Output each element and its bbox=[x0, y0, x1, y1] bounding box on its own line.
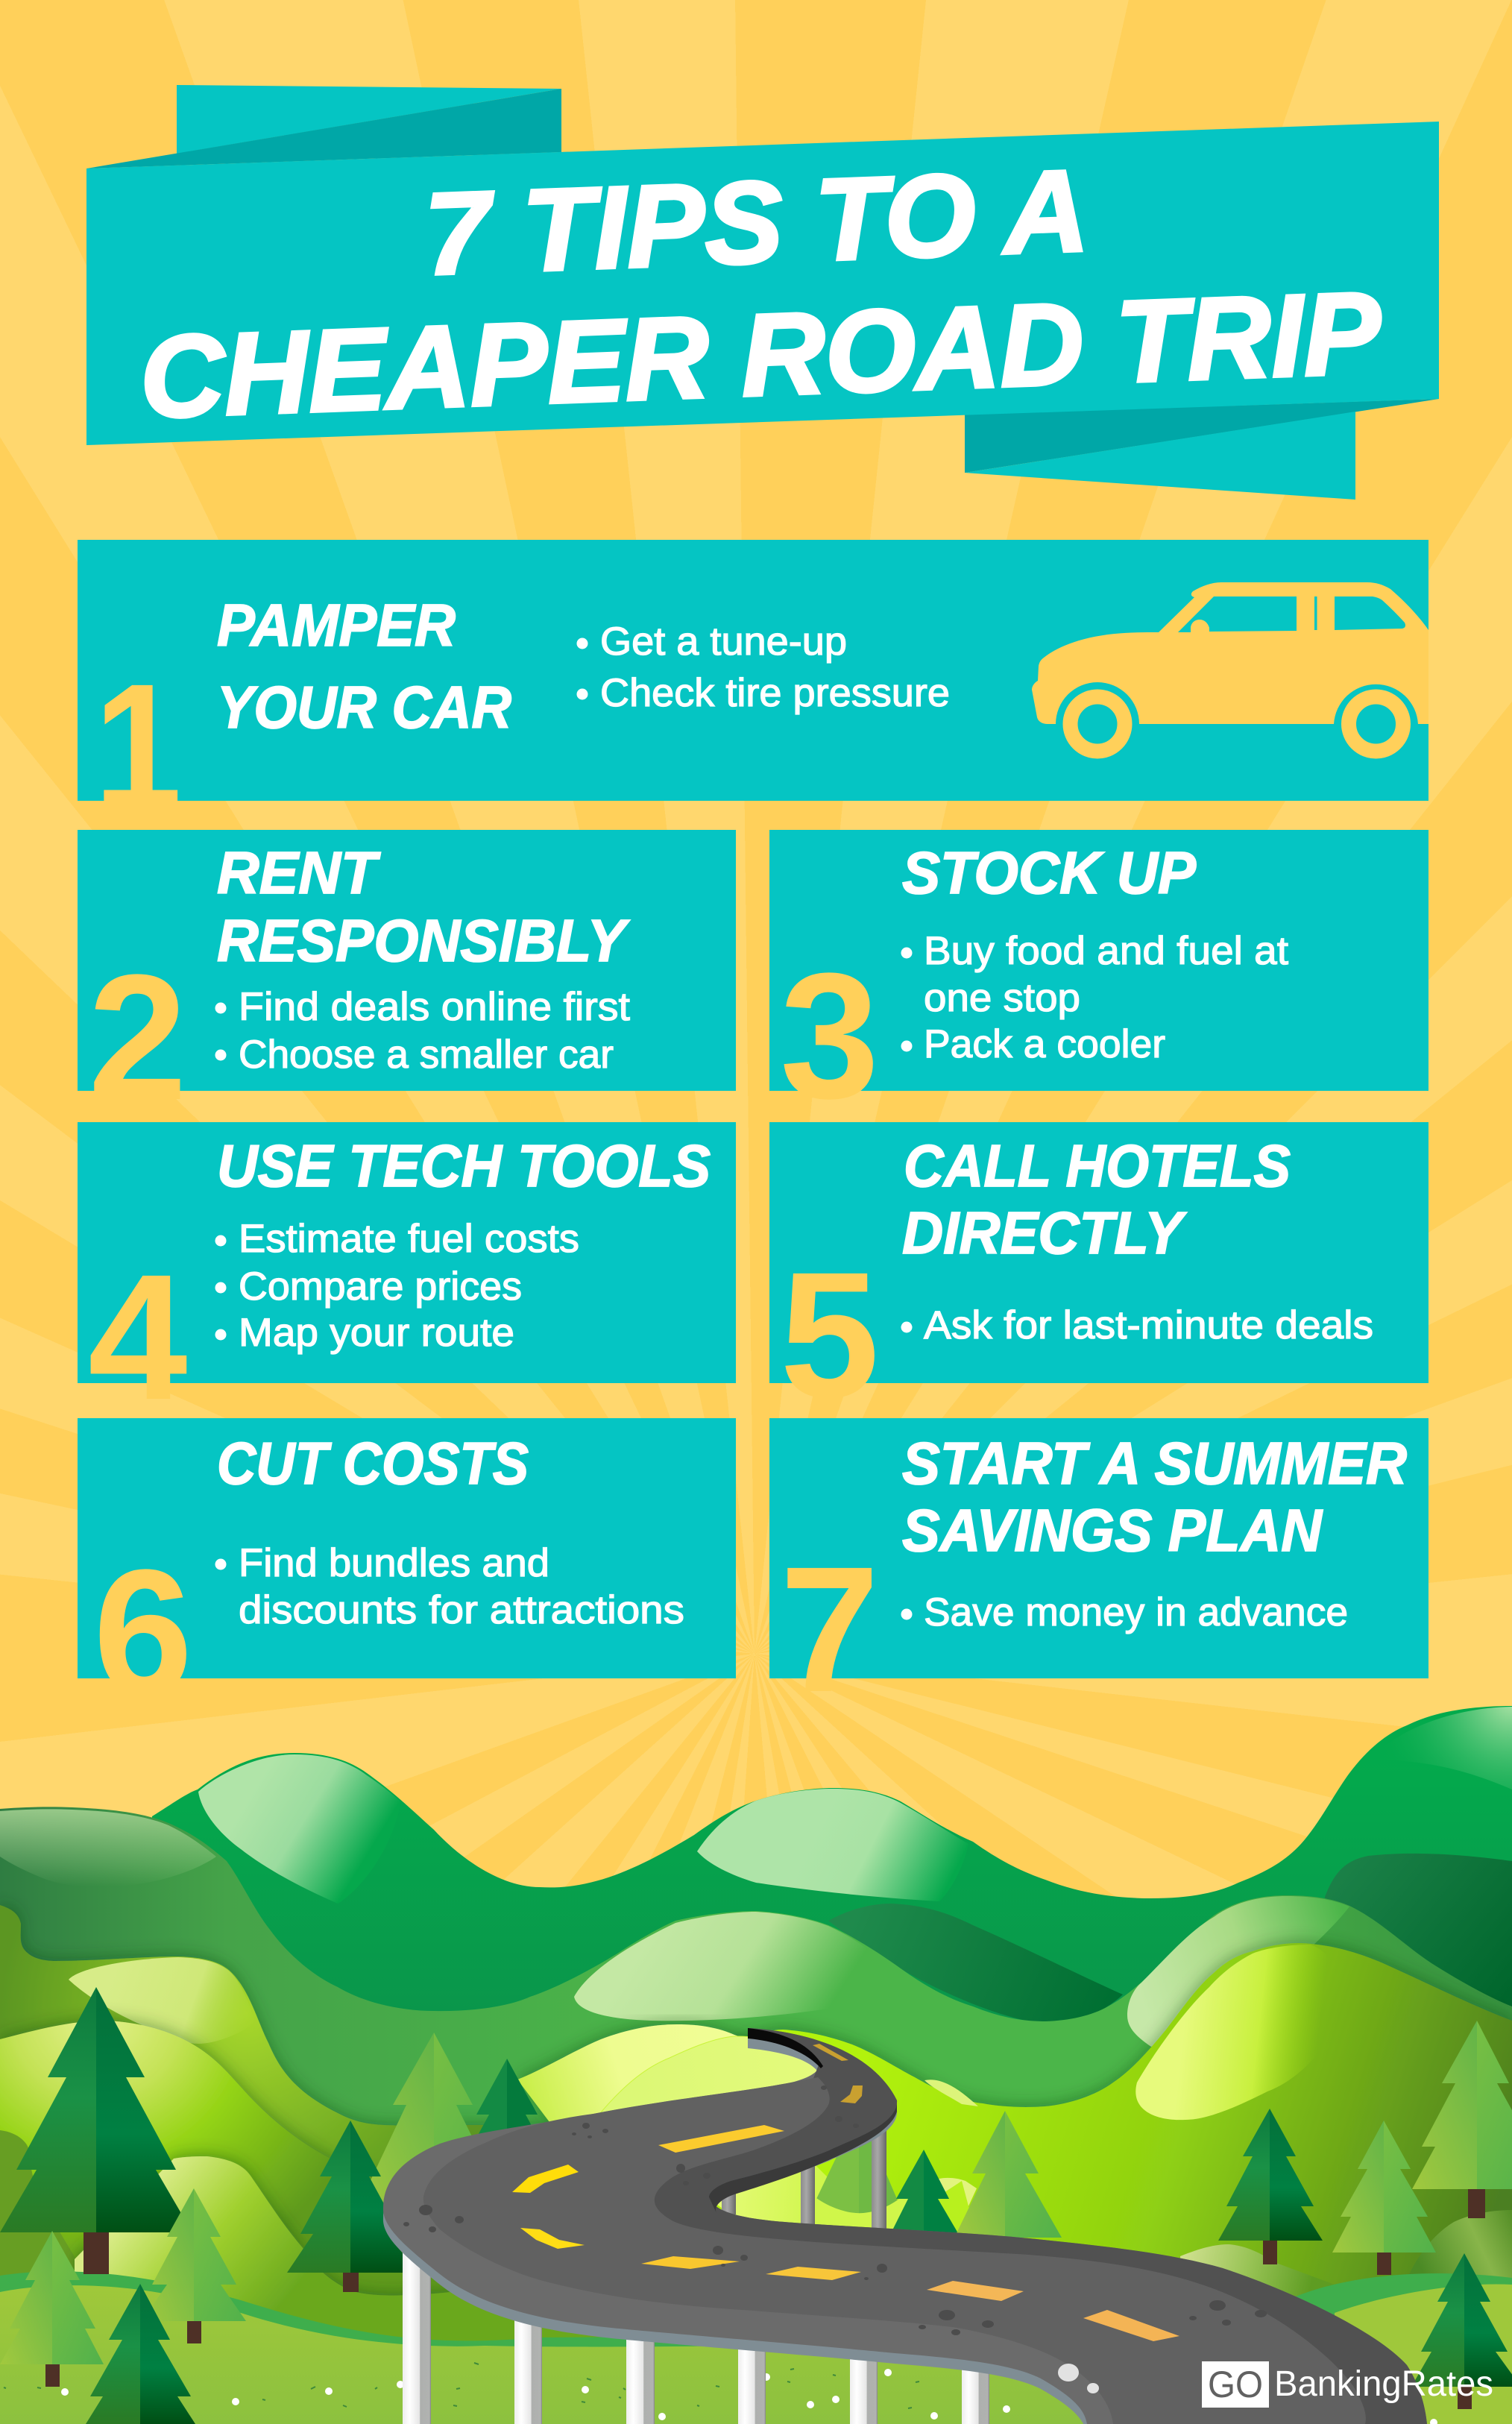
bullets: Check tire pressure bbox=[600, 671, 950, 715]
bullets bbox=[901, 929, 1288, 1066]
ribbon bottom fold bbox=[965, 412, 1355, 500]
heading bbox=[217, 592, 511, 740]
heading: CUT COSTS bbox=[217, 1430, 529, 1496]
heading: DIRECTLY bbox=[902, 1200, 1187, 1266]
back hill highlight right bbox=[1372, 1707, 1512, 1789]
road side lip bbox=[383, 2039, 1427, 2424]
bullets: Buy food and fuel at bbox=[924, 929, 1288, 973]
road lane dashes bbox=[512, 2044, 1179, 2341]
pale hill behind road bbox=[517, 2024, 822, 2125]
bullets: Map your route bbox=[239, 1311, 514, 1355]
bullets bbox=[577, 620, 950, 715]
title line 2: CHEAPER ROAD TRIP bbox=[138, 268, 1384, 443]
title line 1: 7 TIPS TO A bbox=[423, 146, 1091, 300]
tree: light by road right bbox=[954, 2111, 1062, 2238]
bullets: Pack a cooler bbox=[924, 1022, 1165, 1066]
road surface outer band bbox=[383, 2028, 1427, 2424]
second pale hill bbox=[596, 2036, 835, 2132]
small hill near road top bbox=[924, 2080, 978, 2106]
ribbon bottom fold shadow bbox=[965, 399, 1439, 473]
dark hollow centre bbox=[828, 1904, 1123, 2024]
bullets: one stop bbox=[924, 976, 1080, 1020]
road surface centre bbox=[423, 2077, 1366, 2424]
number 1: 1 bbox=[94, 646, 182, 846]
right bright lime hill bbox=[656, 1943, 1512, 2424]
bullets: Compare prices bbox=[239, 1265, 522, 1309]
tree: dark bottom left bbox=[86, 2284, 195, 2424]
title ribbon bbox=[86, 85, 1439, 500]
ground left bbox=[0, 2285, 1118, 2424]
front posts bbox=[403, 2252, 989, 2424]
middle hill bbox=[0, 1807, 1512, 2424]
panel 2: rent responsibly bbox=[78, 830, 736, 1091]
middle hill highlight left bbox=[0, 1809, 216, 1887]
heading: START A SUMMER bbox=[902, 1430, 1407, 1496]
white stones bbox=[1058, 2364, 1099, 2393]
ground right bbox=[1335, 2284, 1512, 2424]
bullets: Estimate fuel costs bbox=[239, 1217, 579, 1261]
left highlight on olive hill bbox=[69, 1957, 255, 2044]
logo: GOBankingRates bbox=[1202, 2361, 1493, 2408]
bullets: Find deals online first bbox=[239, 985, 630, 1029]
heading: PAMPER bbox=[217, 592, 456, 658]
tree: light left small bbox=[142, 2188, 246, 2343]
bullets: Save money in advance bbox=[924, 1590, 1348, 1634]
lower left dark olive bbox=[0, 2130, 89, 2282]
heading: RENT bbox=[217, 840, 381, 906]
tree: light right bbox=[1332, 2121, 1436, 2275]
logo box bbox=[1202, 2361, 1269, 2408]
road inner wall bbox=[709, 2100, 897, 2213]
icon: car bbox=[1032, 582, 1428, 752]
middle hill highlight right bbox=[1127, 1896, 1349, 2047]
olive hill far right bbox=[1409, 2210, 1512, 2304]
panel 7: start a summer savings plan bbox=[769, 1418, 1428, 1678]
highlight on lime hill bbox=[1135, 1945, 1344, 2120]
tree: dark bottom right bbox=[1411, 2253, 1512, 2409]
logo text BankingRates: BankingRates bbox=[1274, 2364, 1493, 2404]
heading: CALL HOTELS bbox=[904, 1133, 1291, 1199]
ribbon main band bbox=[86, 122, 1439, 445]
flowers bbox=[61, 2369, 1437, 2424]
heading bbox=[217, 840, 630, 974]
panel 1: pamper your car bbox=[78, 540, 1428, 801]
bullets: Choose a smaller car bbox=[239, 1033, 614, 1077]
panel 4: use tech tools bbox=[78, 1122, 736, 1383]
numbers bbox=[88, 646, 879, 1732]
lower left lime band bbox=[0, 2021, 671, 2424]
road pitted marks bbox=[403, 2085, 1267, 2335]
middle hill highlight centre bbox=[574, 1912, 868, 2021]
trees bbox=[0, 1987, 1512, 2424]
ribbon top fold bbox=[177, 85, 561, 154]
tree: dark by road right bbox=[891, 2150, 958, 2233]
road bbox=[383, 2028, 1427, 2424]
road end black edge bbox=[748, 2028, 823, 2068]
back hill highlight centre bbox=[697, 1789, 968, 1901]
bullets: Find bundles and bbox=[239, 1541, 549, 1585]
heading bbox=[902, 1133, 1291, 1266]
number 7: 7 bbox=[780, 1529, 879, 1729]
lower blob bbox=[75, 2156, 671, 2424]
green band left bbox=[0, 2271, 1118, 2424]
heading bbox=[902, 1430, 1407, 1564]
panel 6: cut costs bbox=[78, 1418, 736, 1678]
left olive hill bbox=[0, 1905, 671, 2424]
tree: light far right bbox=[1412, 2021, 1512, 2218]
bullets bbox=[215, 1541, 684, 1632]
number 4: 4 bbox=[88, 1237, 187, 1437]
bullets: Get a tune-up bbox=[600, 620, 847, 664]
number 6: 6 bbox=[93, 1532, 192, 1732]
lime curve below loop tree bbox=[809, 2192, 924, 2233]
bullets bbox=[215, 1217, 579, 1355]
tree: dark right bbox=[1218, 2109, 1323, 2264]
lime area inside road loop bbox=[708, 2155, 977, 2237]
tree: light behind road bbox=[358, 2033, 507, 2207]
logo text GO: GO bbox=[1208, 2364, 1263, 2405]
heading: RESPONSIBLY bbox=[217, 907, 630, 974]
green band right bbox=[1296, 2273, 1512, 2424]
ground bbox=[0, 2210, 1512, 2424]
back hill highlight left bbox=[198, 1754, 400, 1904]
ribbon top fold shadow bbox=[86, 89, 561, 169]
panel 5: call hotels directly bbox=[769, 1122, 1428, 1383]
rear posts bbox=[722, 2125, 886, 2229]
heading: SAVINGS PLAN bbox=[902, 1497, 1323, 1564]
heading: YOUR CAR bbox=[217, 674, 511, 740]
bullets: Ask for last-minute deals bbox=[924, 1303, 1373, 1347]
bullets bbox=[215, 985, 630, 1077]
heading: USE TECH TOOLS bbox=[217, 1133, 711, 1199]
tree: light inside loop bbox=[809, 2110, 904, 2214]
road surface dark band bbox=[641, 2028, 1427, 2424]
grass tufts bbox=[4, 2363, 919, 2408]
tree: dark middle bbox=[287, 2121, 418, 2292]
number 3: 3 bbox=[780, 936, 879, 1136]
dark hollow right bbox=[1325, 1854, 1512, 2013]
tree: light far left bbox=[0, 2231, 104, 2387]
number 2: 2 bbox=[88, 937, 187, 1137]
number 5: 5 bbox=[780, 1235, 879, 1435]
panel 3: stock up bbox=[769, 830, 1428, 1091]
road supports bbox=[403, 2125, 989, 2424]
back hill bbox=[152, 1706, 1512, 2424]
landscape: hills bbox=[0, 1706, 1512, 2424]
heading: STOCK UP bbox=[902, 840, 1197, 906]
tree: dark behind road small bbox=[455, 2059, 559, 2177]
tree: large dark left bbox=[0, 1987, 192, 2274]
small pale hill by road right bbox=[924, 2178, 977, 2237]
title bbox=[138, 146, 1384, 443]
bullets: discounts for attractions bbox=[239, 1588, 684, 1632]
small hill right bbox=[1180, 2244, 1335, 2319]
